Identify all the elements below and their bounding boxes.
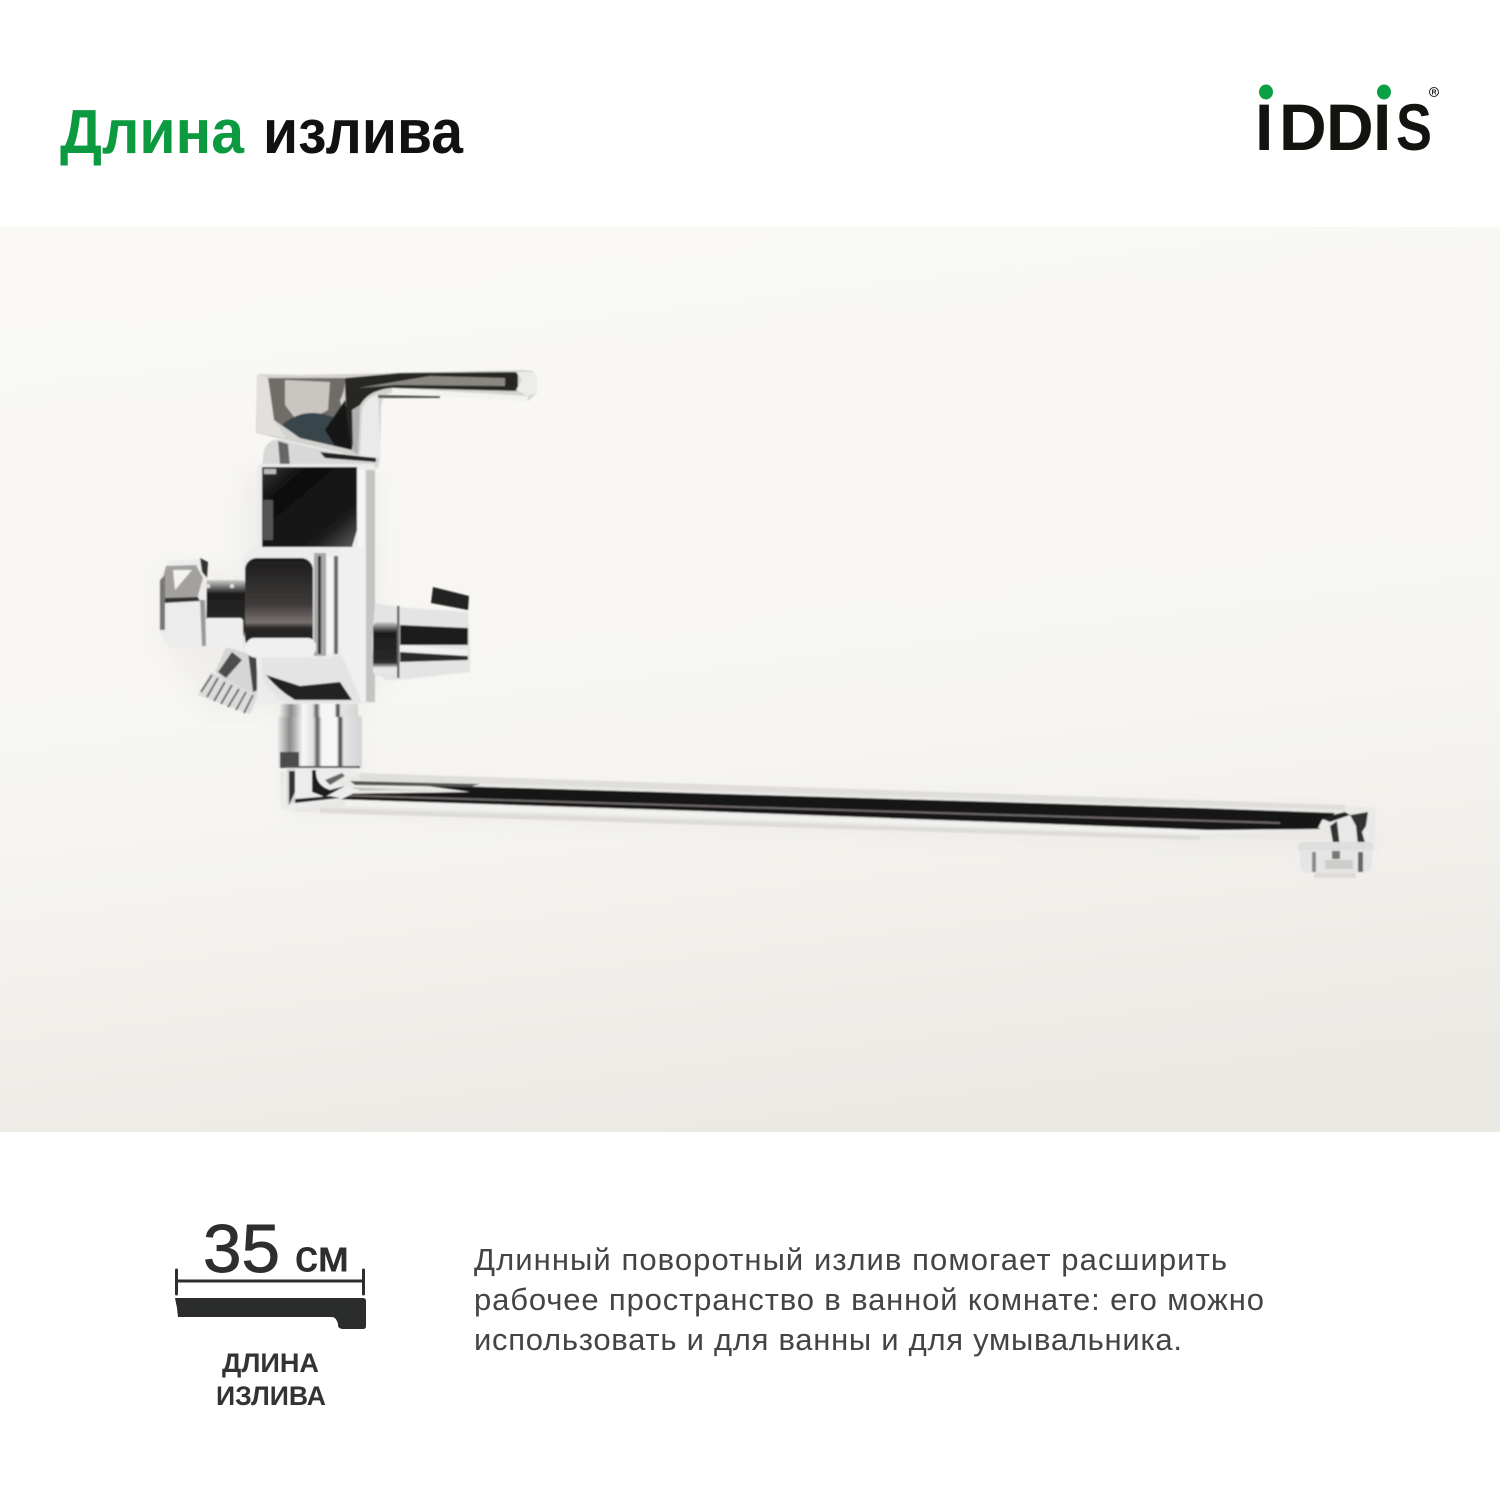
spout pipe bbox=[280, 772, 1375, 852]
lever handle bbox=[256, 370, 537, 458]
elbow bbox=[280, 768, 360, 810]
description text: рабочее пространство в ванной комнате: его можно bbox=[474, 1282, 1264, 1317]
title bbox=[60, 98, 463, 167]
front cube bbox=[243, 548, 340, 658]
front face bbox=[268, 378, 352, 450]
icon label bbox=[216, 1348, 326, 1411]
logo: IDDIS: R bbox=[1431, 90, 1437, 96]
icon label: ДЛИНА bbox=[222, 1348, 319, 1378]
photo: chrome faucet bbox=[160, 370, 1375, 878]
hex nut bbox=[160, 558, 208, 648]
icon label: ИЗЛИВА bbox=[216, 1381, 326, 1411]
logo: IDDIS: IDDI bbox=[1255, 90, 1391, 164]
upper body block bbox=[257, 464, 375, 704]
hex nut connector bbox=[203, 580, 245, 648]
spout tip bbox=[1318, 808, 1375, 852]
description text bbox=[474, 1242, 1264, 1357]
logo: IDDIS bbox=[1255, 84, 1438, 164]
faucet soft shadow bbox=[160, 470, 1370, 850]
title: излива bbox=[263, 98, 463, 167]
top lever dark band bbox=[345, 372, 518, 450]
aerator bbox=[1298, 842, 1373, 878]
icon: spout length 35 cm bbox=[175, 1211, 366, 1411]
lower body bbox=[262, 655, 362, 703]
title: Длина bbox=[60, 98, 244, 167]
logo: IDDIS: S bbox=[1396, 90, 1432, 164]
value: 35 cm bbox=[203, 1211, 349, 1287]
side holder bracket bbox=[372, 587, 470, 680]
value: 35 cm: 35 bbox=[203, 1211, 280, 1287]
cartridge neck under handle bbox=[262, 440, 380, 468]
collar bbox=[278, 716, 362, 768]
dimension line bbox=[176, 1270, 364, 1294]
spout silhouette bbox=[175, 1298, 366, 1329]
description text: использовать и для ванны и для умывальника. bbox=[474, 1322, 1182, 1357]
threaded outlet bbox=[198, 647, 262, 714]
description text: Длинный поворотный излив помогает расширить bbox=[474, 1242, 1227, 1277]
value: 35 cm: см bbox=[295, 1232, 349, 1281]
photo panel background bbox=[0, 227, 1500, 1132]
neck under body bbox=[280, 703, 358, 717]
